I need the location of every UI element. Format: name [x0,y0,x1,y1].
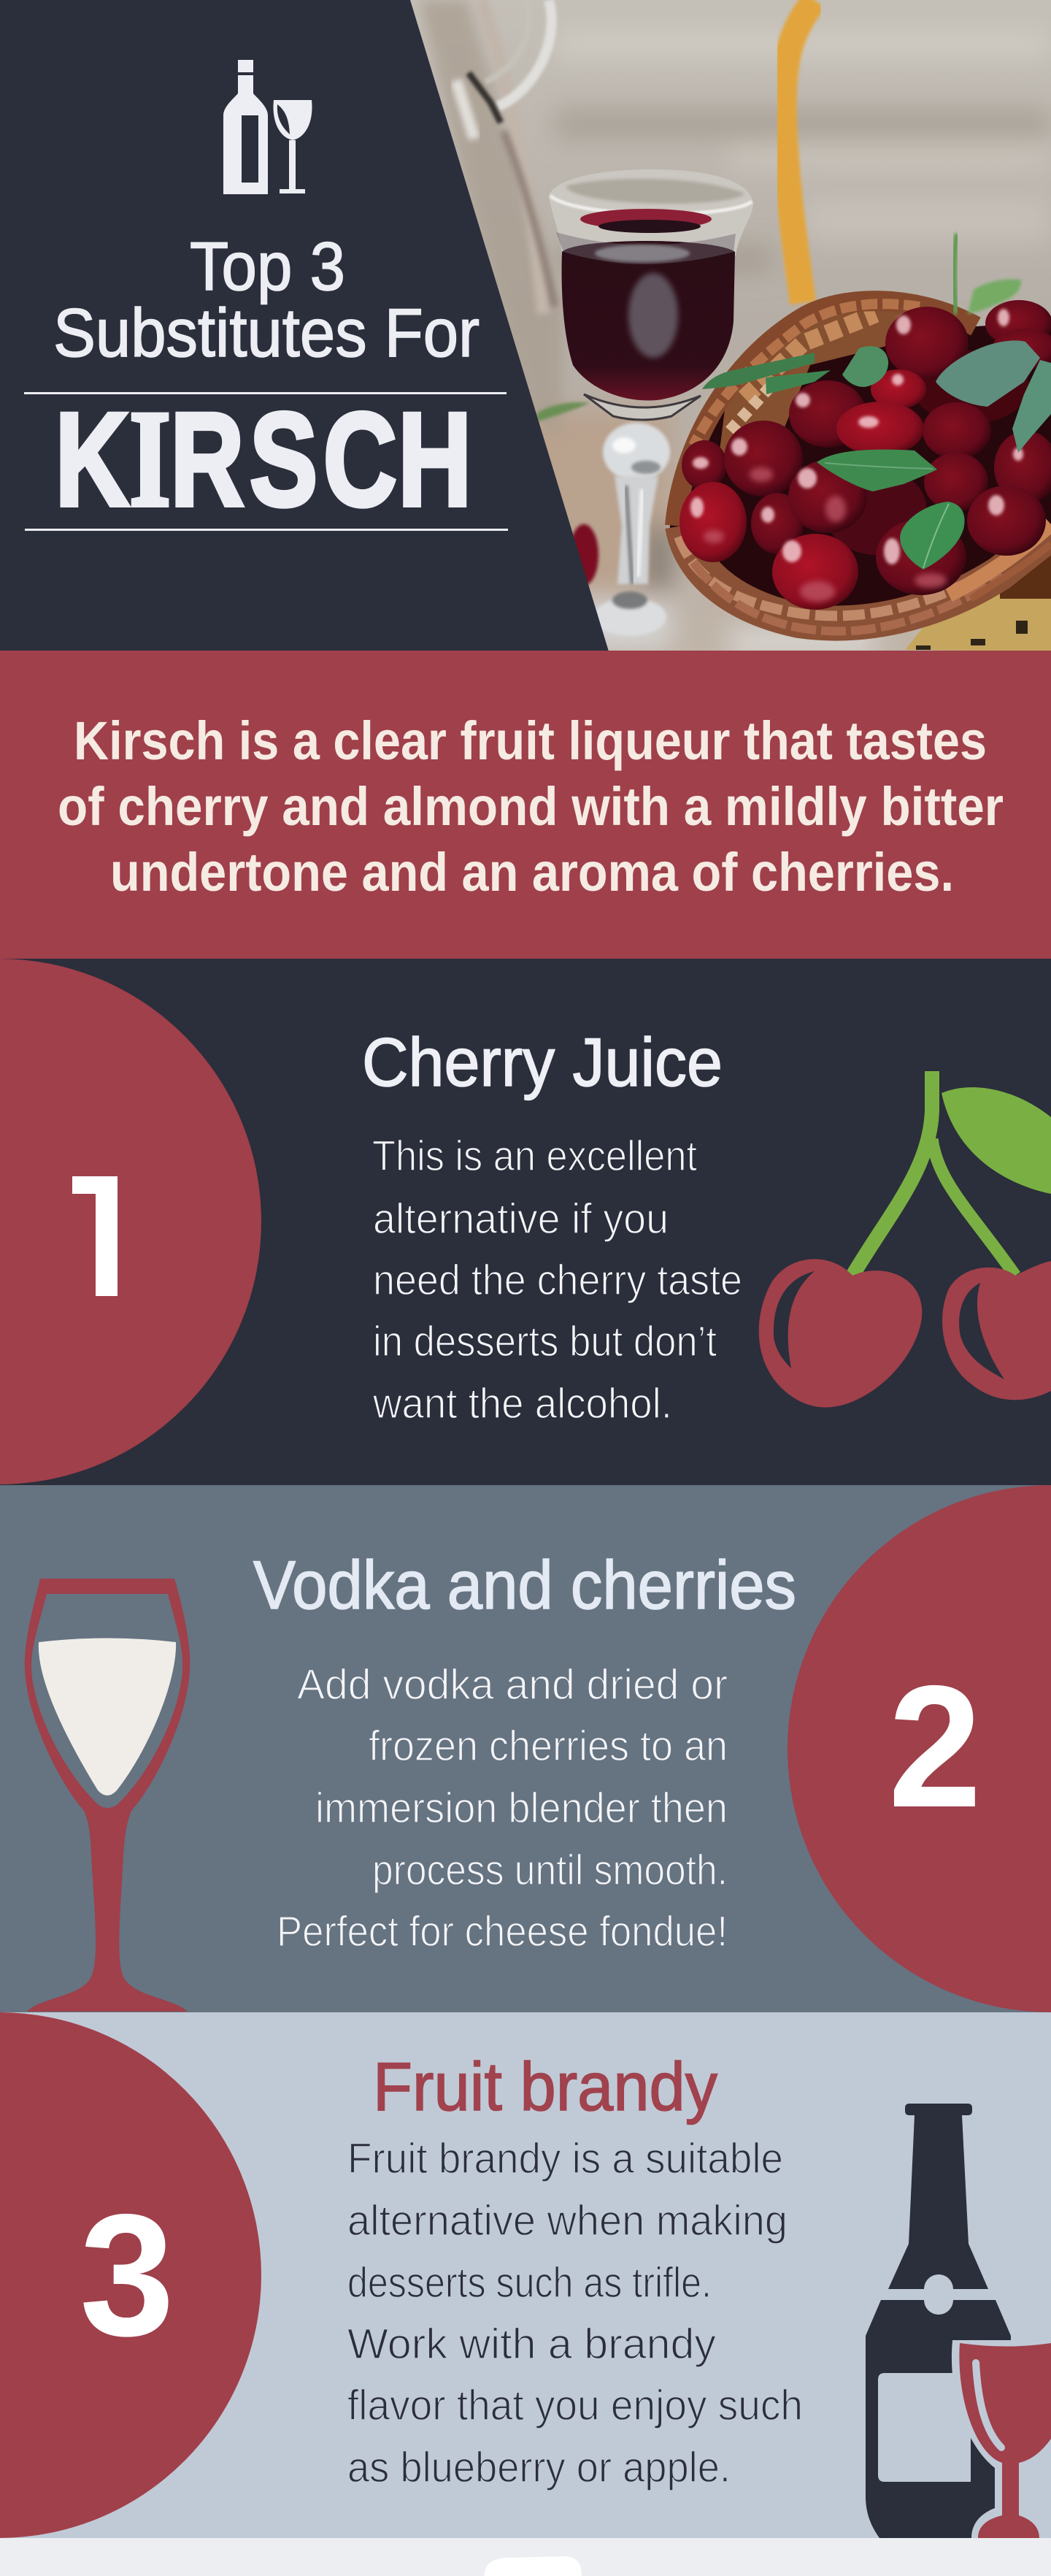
stray leaf and fallen cherry [536,402,598,586]
panel: substitute 2 vodka and cherries [0,1485,1051,2012]
body text: need the cherry taste [373,1257,742,1304]
heading: Fruit brandy: Fruit brandy [373,2048,717,2125]
pitcher [420,0,562,438]
footer strip [0,2538,1051,2576]
number circle 3: 3 [80,2179,174,2372]
heading: Cherry Juice: Cherry Juice [362,1024,723,1100]
icon: bottle with glass [866,2104,1051,2538]
yellow handle [784,0,815,303]
panel: substitute 3 fruit brandy [0,2012,1051,2538]
number circle 1: 1 [62,1140,148,1333]
number circle 1 [0,959,261,1484]
body text: desserts such as trifle. [347,2259,712,2307]
intro text: undertone and an aroma of cherries. [110,842,954,902]
top rule [24,392,507,394]
body text: Add vodka and dried or [297,1661,728,1709]
icon: champagne glass [25,1579,190,2012]
white footer tab [484,2556,582,2576]
body text: flavor that you enjoy such [347,2382,803,2429]
body text: alternative when making [347,2197,788,2245]
panel: substitute 1 cherry juice [0,959,1051,1485]
body text [347,2135,803,2491]
title: Substitutes For: Substitutes For [53,294,480,371]
title: KIRSCH: KIRSCH [55,382,471,535]
number circle 3 [0,2012,261,2538]
number circle 2 [788,1485,1051,2012]
body text: frozen cherries to an [369,1722,728,1770]
basket with cherries and leaves [670,234,1051,651]
bottom rule [25,529,508,531]
heading: Vodka and cherries: Vodka and cherries [253,1546,796,1623]
body text: This is an excellent [372,1132,697,1180]
dark title panel [0,0,609,651]
body text: immersion blender then [315,1785,728,1832]
number circle 2: 2 [888,1650,982,1844]
icon: bottle and wine glass [223,60,312,194]
title: Top 3: Top 3 [190,228,345,304]
intro text [58,710,1004,902]
body text: process until smooth. [372,1847,728,1894]
icon: cherries [759,1071,1051,1408]
body text [372,1132,742,1427]
body text: Work with a brandy [347,2320,716,2368]
body text [277,1661,728,1955]
body text: as blueberry or apple. [347,2444,731,2491]
body text: Fruit brandy is a suitable [347,2135,783,2182]
body text: want the alcohol. [372,1380,672,1427]
body text: Perfect for cheese fondue! [277,1908,728,1955]
body text: alternative if you [373,1195,669,1243]
panel: intro band [0,651,1051,959]
wine glass [549,169,753,636]
body text: in desserts but don’t [373,1318,717,1365]
